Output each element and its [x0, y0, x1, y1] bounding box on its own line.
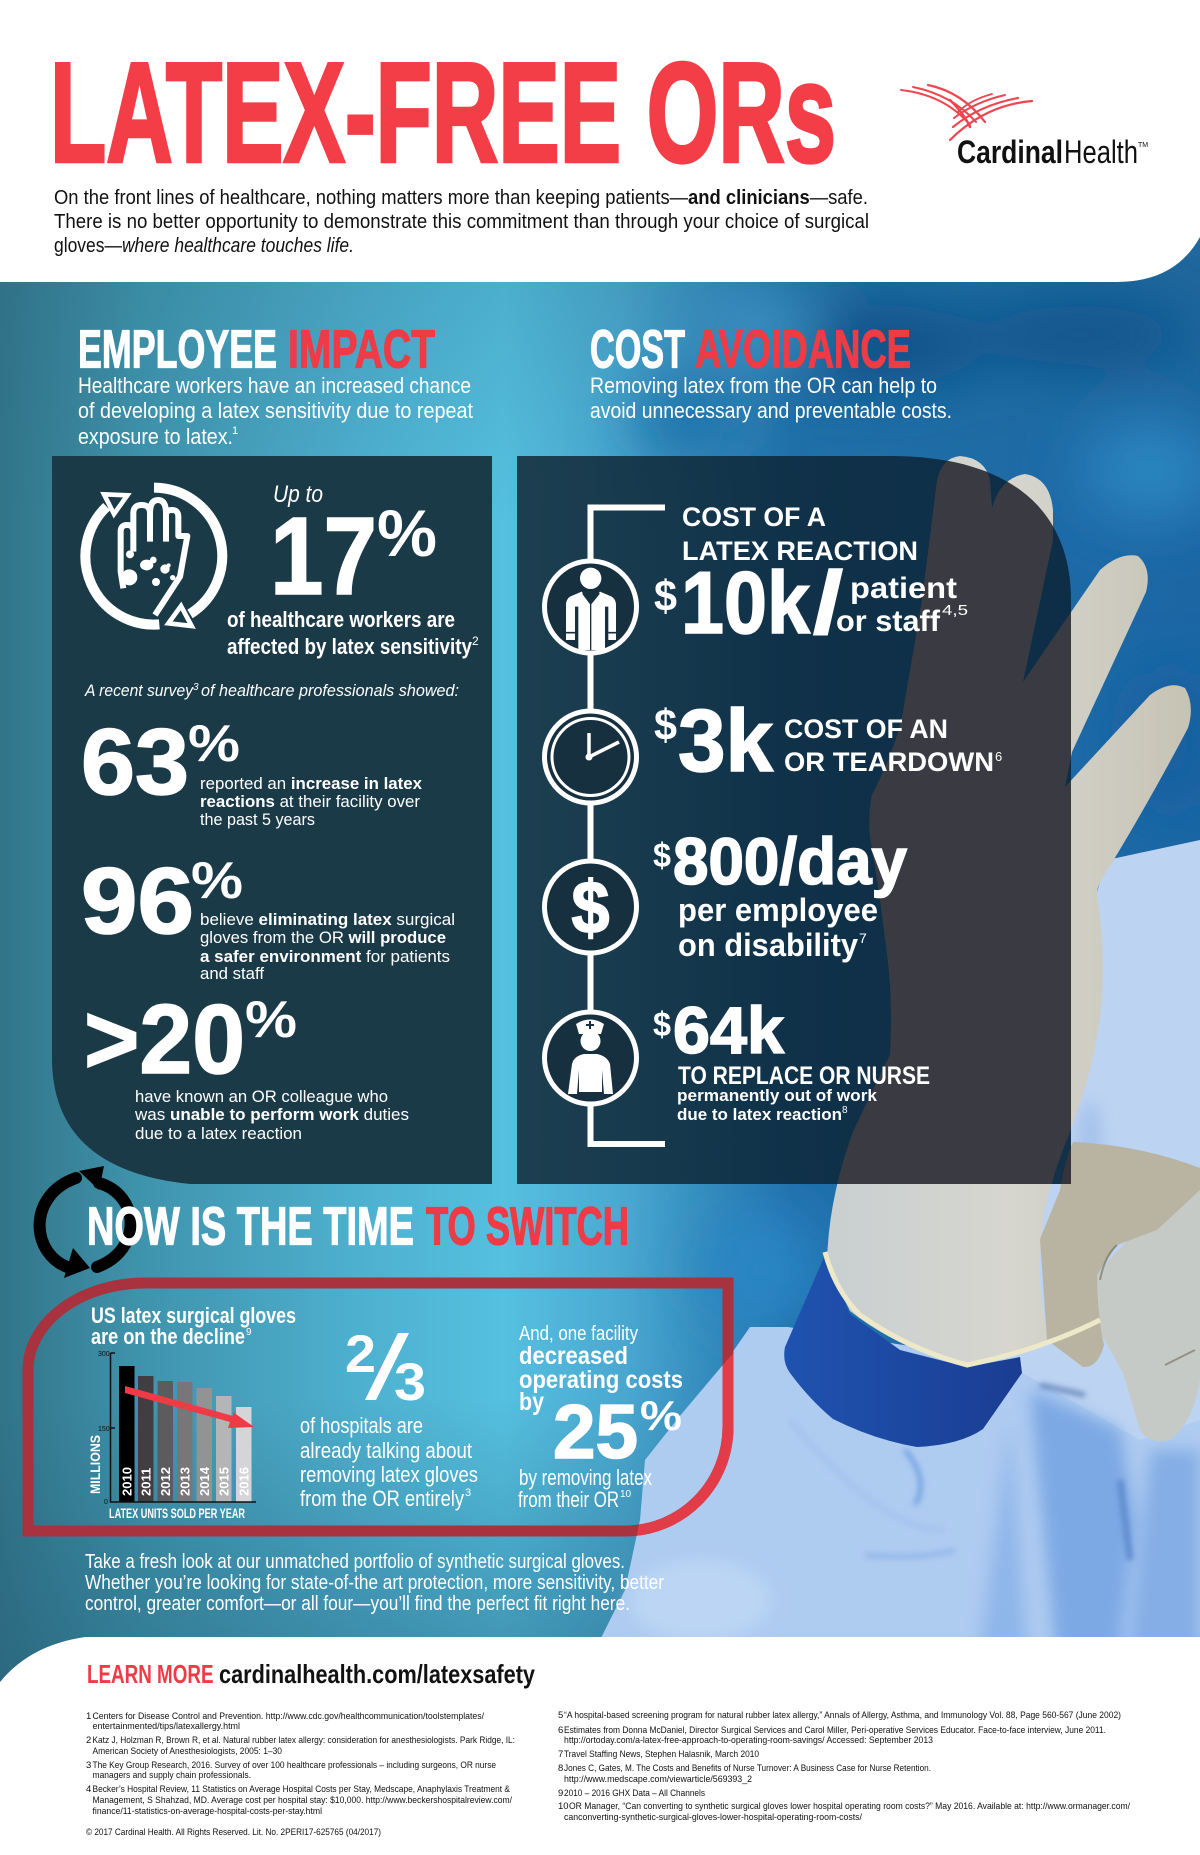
references: left column: [86, 1711, 515, 1838]
cost: OR teardown: 3k: [678, 691, 774, 790]
bars: [119, 1366, 252, 1502]
cost: OR teardown: $: [654, 701, 677, 750]
references: right column: Estimates from Donna McDaniel, Director Surgical Services and Carol Miller, Peri-operative Services Educator. Face-to-face interview, June 2011.: [564, 1725, 1106, 1736]
red rounded frame: [28, 1283, 728, 1531]
cost: disability: 7: [859, 930, 867, 946]
axis numbers: 300: [98, 1351, 110, 1358]
cost: replacing a nurse: $: [653, 1006, 671, 1044]
icon: hand with rash in cycle arrows: [85, 488, 222, 626]
cost: OR teardown: [654, 691, 1002, 790]
references: right column: 7: [558, 1749, 563, 1760]
icon: dollar: $: [572, 866, 610, 949]
references: right column: http://www.medscape.com/viewarticle/569393_2: [564, 1774, 752, 1785]
references: left column: entertainmented/tips/latexallergy.html: [92, 1721, 240, 1732]
learn more call to action: LEARN MORE: [87, 1659, 214, 1689]
background photo: surgical gloves and gown: [0, 230, 1200, 1690]
logo: Cardinal Health: [901, 85, 1148, 170]
cost: replacing a nurse: 64k: [673, 993, 784, 1067]
stat: 17 percent: Up to: [273, 481, 323, 508]
stat: 96 percent: and staff: [200, 965, 264, 983]
stat: 63 percent: reactions at their facility over: [200, 793, 421, 811]
panel: employee impact background: [52, 456, 492, 1184]
intro text: 1: [232, 425, 238, 437]
closing paragraph: Take a fresh look at our unmatched portfolio of synthetic surgical gloves.: [85, 1551, 625, 1573]
heading: now is the time to switch: NOW IS THE TIME: [87, 1196, 414, 1256]
stat: 63 percent: the past 5 years: [200, 811, 315, 829]
references: left column: managers and supply chain professionals.: [92, 1770, 251, 1781]
heading block: cost avoidance: [590, 320, 952, 423]
references: left column: Management, S Shahzad, MD. Average cost per hospital stay: $10,000. http://www.beckershospitalreview.com/: [92, 1795, 512, 1806]
stat: 17 percent: of healthcare workers are: [227, 607, 455, 632]
stat: more than 20 percent: have known an OR colleague who: [135, 1088, 388, 1106]
cost: latex reaction: $: [654, 572, 677, 621]
stat: 25 percent cost decrease: by removing latex: [519, 1465, 652, 1490]
cost: latex reaction: or staff: [836, 605, 941, 638]
intro paragraph: There is no better opportunity to demonstrate this commitment than through your choice of surgical: [54, 211, 869, 233]
cost: disability: per employee: [678, 892, 878, 928]
cost: disability: on disability: [678, 927, 858, 963]
employee impact content: [81, 481, 479, 1143]
stat: two thirds of hospitals: of hospitals are: [300, 1413, 423, 1438]
references: left column: 2: [86, 1735, 91, 1746]
closing paragraph: Whether you’re looking for state-of-the art protection, more sensitivity, better: [85, 1572, 664, 1594]
cost: latex reaction: 4,5: [942, 602, 968, 619]
cost: disability: 800/day: [673, 824, 907, 898]
stat: 96 percent: gloves from the OR will produce: [200, 929, 446, 947]
stat: more than 20 percent: >20: [84, 984, 245, 1094]
year labels: 2013: [178, 1467, 192, 1496]
references: right column: canconverting-synthetic-surgical-gloves-lower-hospital-operating-room-costs/: [564, 1812, 862, 1823]
stat: 96 percent: believe eliminating latex surgical: [200, 911, 455, 929]
stat: 25 percent cost decrease: decreased: [519, 1342, 628, 1370]
references: left column: 3: [86, 1760, 91, 1771]
references: left column: The Key Group Research, 2016. Survey of over 100 healthcare professionals – including surgeons, OR nurse: [92, 1760, 496, 1771]
stat: two thirds of hospitals: already talking about: [300, 1438, 472, 1463]
stat: 25 percent cost decrease: by: [519, 1388, 544, 1416]
year labels: 2014: [197, 1466, 212, 1496]
stat: 17 percent: [227, 481, 479, 659]
timeline line: [590, 508, 665, 1144]
cost avoidance content: [544, 502, 1002, 1144]
stat: two thirds of hospitals: [300, 1325, 478, 1511]
year labels: [120, 1466, 252, 1496]
survey intro: A recent survey: [84, 681, 194, 700]
survey intro: of healthcare professionals showed:: [201, 681, 459, 700]
axis numbers: 150: [98, 1426, 110, 1433]
logo: Cardinal Health: Health: [1064, 134, 1138, 170]
year labels: 2015: [216, 1467, 232, 1496]
cost: replacing a nurse: 8: [842, 1105, 848, 1116]
axis numbers: [98, 1351, 110, 1506]
chart title: [91, 1303, 296, 1349]
stat: 17 percent: 17: [270, 495, 377, 618]
cost: OR teardown: OR TEARDOWN: [784, 747, 994, 777]
intro text: [78, 373, 473, 449]
stat: 63 percent: [81, 709, 423, 829]
axis labels: MILLIONS: [87, 1435, 103, 1494]
references: left column: finance/11-statistics-on-average-hospital-costs-per-stay.html: [92, 1806, 322, 1817]
stat: two thirds of hospitals: 3: [394, 1353, 426, 1412]
stat: 96 percent: 96: [81, 848, 194, 953]
icon: doctor: [544, 561, 636, 653]
survey intro: [84, 681, 459, 700]
icon: dollar: [544, 861, 636, 953]
cost: disability: $: [653, 837, 671, 875]
intro text: exposure to latex.: [78, 424, 233, 449]
stat: 25 percent cost decrease: from their OR: [518, 1487, 619, 1512]
references: right column: Travel Staffing News, Stephen Halasnik, March 2010: [564, 1749, 759, 1760]
icon: black cycle arrows: [40, 1166, 131, 1278]
cost: disability: [653, 824, 907, 963]
intro text: [590, 373, 952, 423]
cost: latex reaction: COST OF A: [682, 502, 826, 532]
references: left column: Katz J, Holzman R, Brown R, et al. Natural rubber latex allergy: consideration for anesthesiologists. Park Ridge, IL:: [92, 1735, 515, 1746]
bar chart: latex units sold per year: LATEX UNITS SOLD PER YEAR: [109, 1505, 245, 1521]
intro paragraph: gloves—where healthcare touches life.: [54, 235, 354, 257]
cost: replacing a nurse: due to latex reaction: [677, 1105, 842, 1124]
stat: two thirds of hospitals: 3: [465, 1487, 471, 1499]
intro text: Removing latex from the OR can help to: [590, 373, 937, 398]
learn more call to action: [87, 1659, 535, 1689]
heading: COST: [590, 320, 685, 380]
cost: OR teardown: COST OF AN: [784, 714, 948, 744]
stat: two thirds of hospitals: 2: [345, 1325, 376, 1384]
trend arrow: [125, 1386, 254, 1428]
references: left column: Becker’s Hospital Review, 11 Statistics on Average Hospital Costs per Stay, Medscape, Anaphylaxis Treatment &: [92, 1784, 511, 1795]
cost: latex reaction: [654, 502, 968, 652]
stat: more than 20 percent: due to a latex reaction: [135, 1125, 302, 1143]
closing paragraph: [85, 1551, 664, 1615]
references: right column: 8: [558, 1763, 563, 1774]
references: right column: [558, 1710, 1130, 1823]
references: right column: 6: [558, 1725, 563, 1736]
gown: [1000, 840, 1200, 1440]
axes and ticks: [110, 1353, 256, 1502]
icon: cardinal swoosh: [901, 85, 1032, 140]
year labels: 2016: [236, 1467, 252, 1496]
glove: raised hand: [827, 456, 1191, 1367]
heading block: employee impact: [78, 320, 473, 449]
references: right column: 10: [558, 1801, 569, 1812]
references: right column: http://ortoday.com/a-latex-free-approach-to-operating-room-savings/ Accessed: September 2013: [564, 1735, 933, 1746]
stat: 25 percent cost decrease: And, one facility: [519, 1323, 638, 1345]
heading: now is the time to switch: TO SWITCH: [426, 1196, 629, 1256]
intro text: avoid unnecessary and preventable costs.: [590, 398, 952, 423]
stat: 63 percent: %: [188, 715, 240, 773]
closing paragraph: control, greater comfort—or all four—you’ll find the perfect fit right here.: [85, 1593, 630, 1615]
bar chart: latex units sold per year: [87, 1303, 296, 1521]
stat: 96 percent: a safer environment for patients: [200, 948, 450, 966]
cost: OR teardown: 6: [995, 749, 1002, 764]
stat: 63 percent: reported an increase in latex: [200, 775, 423, 793]
stat: 96 percent: [81, 848, 455, 983]
references: right column: OR Manager, “Can converting to synthetic surgical gloves lower hospital operating room costs?” May 2016. Available at: http://www.ormanager.com/: [569, 1801, 1130, 1812]
cost: latex reaction: LATEX REACTION: [682, 536, 918, 566]
axis numbers: 0: [104, 1499, 108, 1506]
intro paragraph: On the front lines of healthcare, nothing matters more than keeping patients—and clinicians—safe.: [54, 187, 868, 209]
heading: EMPLOYEE: [78, 320, 277, 380]
wordmark: Cardinal: [957, 134, 1063, 170]
year labels: 2010: [120, 1467, 134, 1496]
references: right column: 2010 – 2016 GHX Data – All Channels: [564, 1788, 705, 1799]
references: right column: 5: [558, 1710, 563, 1721]
references: right column: “A hospital-based screening program for natural rubber latex allergy,” Annals of Allergy, Asthma, and Immunology Vol. 88, Page 560-567 (June 2002): [564, 1710, 1121, 1721]
stat: two thirds of hospitals: removing latex gloves: [300, 1462, 478, 1487]
icon: clock: [544, 711, 636, 803]
references: left column: 4: [86, 1784, 91, 1795]
references: left column: © 2017 Cardinal Health. All Rights Reserved. Lit. No. 2PERI17-625765 (04/2017): [86, 1827, 381, 1838]
logo: Cardinal Health: TM: [1138, 142, 1148, 149]
gown blue cuff: [784, 1255, 1022, 1447]
chart title: 9: [246, 1327, 252, 1338]
stat: more than 20 percent: %: [245, 991, 297, 1049]
heading block: employee impact: IMPACT: [288, 320, 435, 380]
year labels: 2012: [158, 1467, 173, 1496]
references: left column: 1: [86, 1711, 91, 1722]
references: right column: Jones C, Gates, M. The Costs and Benefits of Nurse Turnover: A Business Case for Nurse Retention.: [564, 1763, 931, 1774]
stat: two thirds of hospitals: from the OR entirely: [300, 1486, 464, 1511]
stat: 25 percent cost decrease: 25: [553, 1390, 638, 1475]
stat: 17 percent: 2: [472, 634, 479, 648]
chart title: are on the decline: [91, 1324, 245, 1349]
panel: cost avoidance background: [517, 456, 1071, 1184]
cost: replacing a nurse: TO REPLACE OR NURSE: [678, 1062, 930, 1090]
icon: nurse: [544, 1012, 636, 1104]
glove lip: [825, 1252, 1100, 1365]
stat: 25 percent cost decrease: [518, 1323, 683, 1512]
cost: replacing a nurse: [653, 993, 930, 1124]
chart title: US latex surgical gloves: [91, 1303, 296, 1328]
stat: 25 percent cost decrease: 10: [620, 1489, 632, 1500]
stat: 17 percent: affected by latex sensitivity: [227, 634, 473, 659]
cost: latex reaction: patient: [850, 572, 957, 605]
cost: latex reaction: 10k: [681, 553, 811, 652]
learn more call to action: cardinalhealth.com/latexsafety: [219, 1659, 535, 1689]
year labels: 2011: [138, 1468, 154, 1496]
cost: latex reaction: /: [813, 553, 843, 652]
stat: 96 percent: %: [191, 852, 243, 910]
intro text: of developing a latex sensitivity due to repeat: [78, 398, 473, 423]
intro text: Healthcare workers have an increased chance: [78, 373, 471, 398]
cost: replacing a nurse: permanently out of work: [677, 1086, 878, 1105]
intro paragraph: [54, 187, 869, 257]
stat: more than 20 percent: was unable to perform work duties: [134, 1106, 409, 1124]
heading block: cost avoidance: AVOIDANCE: [695, 320, 911, 380]
stat: more than 20 percent: [84, 984, 409, 1143]
glove: pulling hand: [1040, 1142, 1200, 1441]
stat: 25 percent cost decrease: %: [640, 1392, 682, 1439]
survey intro: 3: [193, 682, 199, 693]
stat: 17 percent: %: [377, 496, 437, 570]
stat: 63 percent: 63: [81, 709, 189, 814]
references: left column: Centers for Disease Control and Prevention. http://www.cdc.gov/healthcommunication/toolstemplates/: [92, 1711, 484, 1722]
header: [50, 34, 869, 257]
references: right column: 9: [558, 1788, 563, 1799]
references: left column: American Society of Anesthesiologists, 2005: 1–30: [92, 1746, 282, 1757]
stat: 25 percent cost decrease: operating costs: [519, 1366, 683, 1394]
